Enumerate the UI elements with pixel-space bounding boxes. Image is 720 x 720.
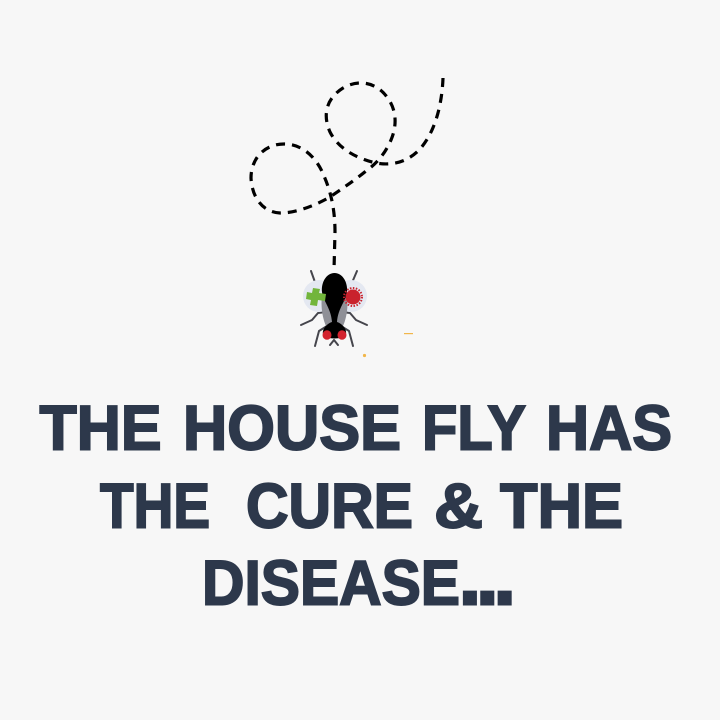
title: DISEASE xyxy=(202,548,460,618)
fly body xyxy=(322,273,347,338)
flight path: dashed loops xyxy=(251,78,443,270)
icon: red virus xyxy=(344,288,362,306)
fly red eyes xyxy=(322,330,332,340)
icon: house fly with cure and disease xyxy=(301,271,367,346)
title: THE xyxy=(100,472,210,542)
title: THE xyxy=(500,472,623,542)
title: & xyxy=(434,472,483,542)
title: ... xyxy=(458,528,511,624)
title: HAS xyxy=(546,394,672,464)
title: FLY xyxy=(422,394,526,464)
icon: green cross xyxy=(306,288,326,306)
title: HOUSE xyxy=(183,394,401,464)
title: THE xyxy=(40,394,162,464)
title xyxy=(40,394,672,624)
orange specks xyxy=(363,333,413,357)
fly wings xyxy=(303,280,335,312)
title: CURE xyxy=(246,472,413,542)
fly legs xyxy=(301,271,367,346)
